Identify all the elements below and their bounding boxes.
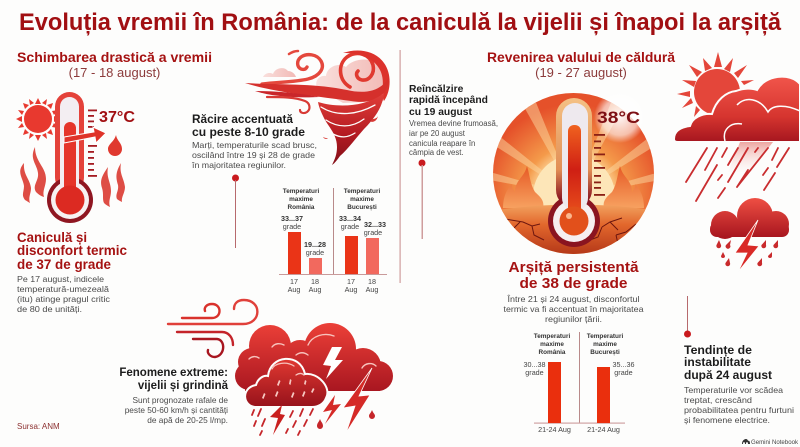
text block: racire [191, 114, 317, 170]
bar chart: 21-24 aug: România [538, 349, 566, 356]
icon: flames [20, 147, 125, 207]
bar chart: 21-24 aug: 21-24 Aug [538, 425, 571, 434]
text block: reincalzire: iar pe 20 august [409, 129, 466, 138]
38 degrees label: 38°C [597, 109, 640, 127]
text block: fenomene: peste 50-60 km/h și cantități [125, 405, 228, 415]
rain [686, 148, 789, 201]
bar chart: 21-24 aug: 30...38 [524, 360, 545, 369]
text block: tendinte: instabilitate [684, 355, 751, 369]
text block: arsita: de 38 de grade [520, 275, 628, 292]
text block: reincalzire: cu 19 august [409, 107, 473, 118]
bar chart: 21-24 aug: 35...36 [613, 360, 634, 369]
sun [677, 52, 754, 117]
bar chart: 17-18 aug: grade [306, 248, 324, 257]
text block: reincalzire [409, 84, 498, 157]
text block: reincalzire: câmpia de vest. [409, 148, 464, 157]
text block: reincalzire: Reîncălzire [409, 84, 464, 95]
text block: reincalzire: Vremea devine frumoasă, [409, 119, 498, 128]
bar chart: 17-18 aug: grade [341, 222, 359, 231]
bar chart: 21-24 aug: Temperaturi [534, 333, 570, 340]
icon: thermometer with sun and flames [16, 92, 125, 223]
text block: tendinte: treptat, crescând [684, 395, 752, 405]
text block: fenomene: Fenomene extreme: [119, 367, 228, 379]
text block: tendinte: după 24 august [684, 368, 772, 382]
text block: fenomene [119, 367, 229, 425]
funnel [318, 93, 384, 165]
text block: canicula: disconfort termic [17, 243, 127, 258]
bar chart: 17-18 aug: maxime [350, 196, 374, 203]
text block: tendinte: Temperaturile vor scădea [684, 385, 783, 395]
source: Sursa: ANM [17, 422, 60, 431]
bar chart: 21-24 aug [524, 332, 634, 434]
text block: arsita: termic va fi accentuat în majoritatea [504, 304, 644, 314]
bar chart: 17-18 aug: Aug [309, 285, 321, 294]
icon: heat scene with thermometer [493, 93, 654, 254]
red bolts [343, 368, 372, 433]
cracked ground [502, 204, 646, 254]
timeline marker 2 [418, 160, 426, 239]
glow behind label [594, 91, 646, 143]
text block: canicula: de 37 de grade [17, 257, 111, 272]
bar chart: 17-18 aug: Temperaturi [283, 188, 319, 195]
text block: fenomene: de apă de 20-25 l/mp. [147, 415, 228, 425]
text block: tendinte [684, 343, 794, 425]
text block: fenomene: Sunt prognozate rafale de [133, 395, 228, 405]
37 degrees label: 37°C [99, 109, 135, 126]
text block: fenomene: vijelii și grindină [138, 380, 229, 392]
watermark: Gemini Notebook [751, 440, 799, 446]
panel: right heading [487, 50, 675, 80]
thermometer [556, 98, 592, 208]
timeline marker 1 [232, 174, 239, 248]
bar chart: 17-18 aug: Temperaturi [344, 188, 380, 195]
spiral right [341, 54, 373, 87]
panel: left heading: (17 - 18 august) [69, 65, 160, 80]
bar chart: 17-18 aug: Aug [345, 285, 357, 294]
light beam [728, 142, 773, 172]
back cloud [235, 323, 393, 391]
icon: drop [108, 135, 122, 156]
text block: canicula: Caniculă și [17, 230, 87, 245]
bar chart: 21-24 aug: grade [525, 368, 544, 377]
bar chart: 17-18 aug: 33...34 [339, 214, 361, 223]
watermark [742, 439, 799, 446]
text block: racire: oscilând între 19 și 28 de grade [192, 150, 315, 160]
text block: arsita: regiunilor țării. [545, 314, 602, 324]
bar chart: 17-18 aug: 17 [290, 277, 298, 286]
bar chart: 17-18 aug: România [288, 204, 315, 211]
text block: arsita: Arșiță persistentă [508, 259, 639, 276]
bar chart: 17-18 aug: 33...37 [281, 214, 303, 223]
spiral left [262, 55, 322, 84]
thermometer body [55, 92, 84, 192]
text block: tendinte: probabilitatea pentru furtuni [684, 405, 794, 415]
panel: right heading: (19 - 27 august) [535, 65, 627, 80]
text block: arsita [504, 259, 644, 324]
bar chart: 17-18 aug: Aug [288, 285, 300, 294]
text block: canicula: de 80 de unități. [17, 304, 82, 314]
timeline marker 3 [684, 296, 691, 338]
bar chart: 17-18 aug: 19...28 [304, 240, 326, 249]
icon: tornado and wind [245, 50, 390, 165]
bar chart: 17-18 aug: 18 [368, 277, 376, 286]
text block: canicula [17, 230, 127, 314]
bar chart: 17-18 aug: 32...33 [364, 220, 386, 229]
icon: storm cloud with bolt [710, 198, 789, 272]
text block: racire: Marți, temperaturile scad brusc, [192, 140, 317, 150]
scale ticks [594, 134, 605, 196]
bar chart: 21-24 aug: grade [614, 368, 633, 377]
bar chart: 21-24 aug: maxime [593, 341, 617, 348]
bar chart: 21-24 aug: București [590, 349, 620, 356]
central divider [400, 50, 401, 283]
icon: wind gusts [168, 300, 257, 357]
cloud [674, 77, 800, 142]
icon: sun [16, 98, 60, 141]
title: Evoluția vremii în România: de la caniculă la vijelii și înapoi la arșiță [19, 9, 781, 36]
text block: tendinte: Tendințe de [684, 343, 752, 357]
text block: tendinte: și fenomene electrice. [684, 415, 770, 425]
panel: left heading [17, 50, 212, 80]
bar chart: 21-24 aug: Temperaturi [587, 333, 623, 340]
bar chart: 17-18 aug: 17 [347, 277, 355, 286]
bar chart: 17-18 aug: Aug [366, 285, 378, 294]
bar chart: 17-18 aug: București [347, 204, 377, 211]
front cloud [245, 359, 327, 407]
bar chart: 17-18 aug [279, 188, 387, 294]
panel: right heading: Revenirea valului de căldură [487, 50, 675, 65]
text block: canicula: Pe 17 august, indicele [17, 274, 104, 284]
rain [252, 409, 313, 435]
bar chart: 17-18 aug: grade [283, 222, 301, 231]
scale ticks [88, 110, 97, 177]
text block: arsita: Între 21 și 24 august, disconfortul [506, 294, 640, 304]
text block: canicula: temperatură-umezeală [17, 284, 109, 294]
wind streaks [245, 77, 389, 102]
icon: storm clouds [235, 323, 393, 435]
text block: racire: cu peste 8-10 grade [192, 127, 305, 139]
text block: racire: Răcire accentuată [192, 114, 294, 126]
text block: reincalzire: canicula reapare în [409, 139, 475, 148]
icon: sun with cloud and rain [674, 52, 800, 201]
bar chart: 21-24 aug: maxime [540, 341, 564, 348]
text block: racire: în majoritatea regiunilor. [191, 160, 286, 170]
sun disc [493, 93, 654, 254]
flames [503, 166, 644, 208]
white bolt [323, 347, 343, 379]
pink clouds [263, 59, 388, 103]
text block: canicula: (itu) atinge pragul critic [17, 294, 111, 304]
bar chart: 17-18 aug: 18 [311, 277, 319, 286]
bar chart: 17-18 aug: grade [364, 228, 382, 237]
arrow [64, 127, 106, 143]
text block: reincalzire: rapidă începând [409, 95, 488, 106]
panel: left heading: Schimbarea drastică a vremii [17, 50, 212, 65]
bar chart: 21-24 aug: 21-24 Aug [587, 425, 620, 434]
bar chart: 17-18 aug: maxime [289, 196, 313, 203]
